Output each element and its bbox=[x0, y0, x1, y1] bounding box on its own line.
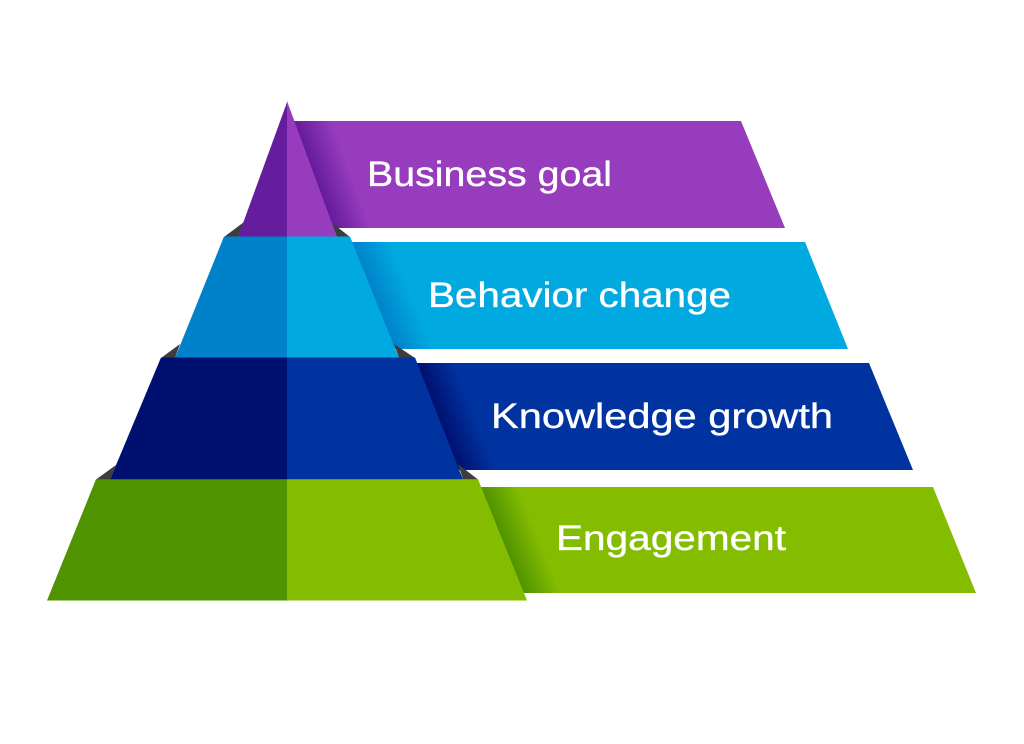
label: Behavior change: Behavior change bbox=[428, 276, 731, 315]
tier: blue bbox=[175, 236, 399, 358]
shadow notches bbox=[96, 222, 478, 480]
band: Engagement bbox=[474, 487, 976, 593]
band: Knowledge growth bbox=[410, 363, 913, 470]
band: Business goal bbox=[287, 121, 785, 228]
tier: purple tip bbox=[238, 101, 337, 237]
band: Behavior change bbox=[345, 242, 848, 349]
label: Business goal: Business goal bbox=[367, 155, 612, 194]
label: Knowledge growth: Knowledge growth bbox=[491, 397, 833, 436]
pyramid bbox=[47, 101, 527, 600]
tier: navy bbox=[110, 358, 463, 480]
tier: green bbox=[47, 479, 527, 600]
label: Engagement: Engagement bbox=[556, 519, 786, 558]
